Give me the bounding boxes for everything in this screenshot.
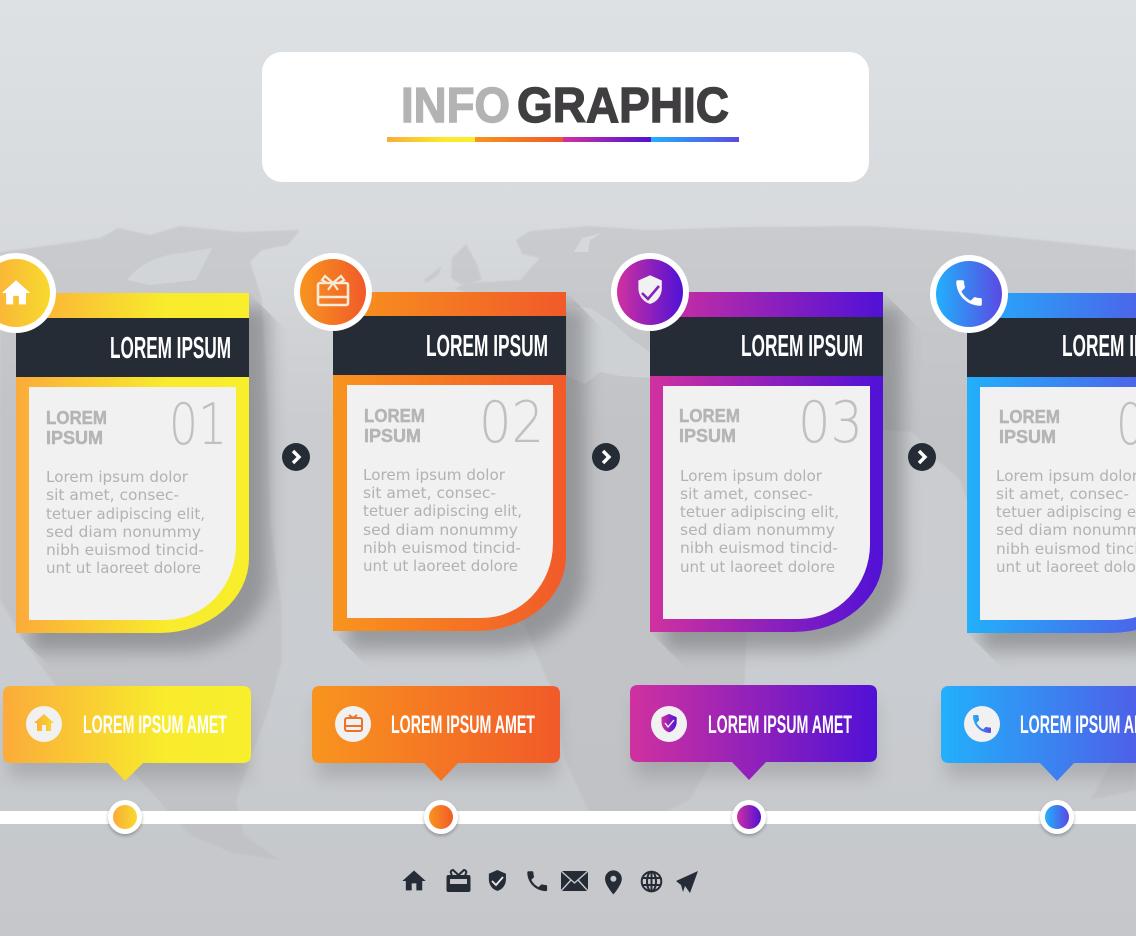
subheading: IPSUM	[679, 425, 736, 446]
icon: location pin	[605, 870, 622, 894]
callout 3	[630, 685, 877, 780]
card heading: LOREM IPSUM	[110, 330, 231, 365]
lighter mediterranean patch	[567, 306, 650, 384]
body text: sit amet, consec-	[680, 485, 813, 503]
icon: shield	[489, 870, 506, 891]
icon: globe	[642, 872, 661, 891]
subheading: IPSUM	[46, 427, 103, 448]
body text: nibh euismod tincid-	[363, 539, 521, 557]
card frame	[16, 293, 249, 633]
title colour bar	[387, 137, 739, 142]
body text: tetuer adipiscing elit,	[46, 505, 205, 523]
icon: gift	[446, 870, 470, 892]
icon: phone	[527, 871, 547, 891]
world map silhouette	[0, 226, 1136, 860]
panel: card 02	[294, 253, 586, 650]
lighter arctic bay in the map	[127, 248, 212, 285]
body text: nibh euismod tincid-	[46, 541, 204, 559]
body text: unt ut laoreet dolore	[363, 557, 518, 575]
dark header band	[967, 318, 1136, 377]
arrow: card 2 to 3	[592, 443, 620, 471]
callout 4	[941, 686, 1136, 781]
number: 01	[169, 392, 227, 458]
title text: GRAPHIC	[517, 79, 729, 133]
card frame	[333, 292, 566, 631]
body text: sit amet, consec-	[996, 485, 1129, 503]
callout 1	[3, 686, 251, 781]
content panel	[663, 386, 870, 619]
subheading: IPSUM	[999, 426, 1056, 447]
panel: card 03	[611, 253, 903, 650]
card heading: LOREM IPSUM	[426, 328, 548, 363]
number: 03	[798, 390, 863, 456]
dark header band	[650, 317, 883, 376]
body text: sit amet, consec-	[363, 484, 496, 502]
card frame	[650, 292, 883, 632]
callout icon: phone	[964, 706, 1000, 742]
title panel	[262, 52, 869, 182]
subheading: IPSUM	[364, 425, 421, 446]
timeline marker 1	[108, 800, 142, 836]
timeline marker 2	[424, 800, 458, 836]
body text: unt ut laoreet dolore	[46, 559, 201, 577]
body text: Lorem ipsum dolor	[996, 467, 1136, 485]
panel: card 04	[930, 255, 1136, 651]
subheading: LOREM	[999, 406, 1060, 427]
body text: sed diam nonummy	[363, 521, 518, 539]
icon: shield badge	[611, 253, 689, 331]
subheading: LOREM	[364, 405, 425, 426]
body text: Lorem ipsum dolor	[680, 467, 823, 485]
body text: sit amet, consec-	[46, 486, 179, 504]
icon: home	[402, 871, 426, 890]
timeline marker 3	[732, 800, 766, 836]
body text: Lorem ipsum dolor	[46, 468, 189, 486]
number: 02	[479, 390, 544, 456]
panel: card 01	[0, 253, 269, 651]
callout icon: shield	[651, 706, 687, 742]
card frame	[967, 293, 1136, 633]
icon: gift badge	[294, 253, 372, 331]
icon: paper plane	[676, 871, 698, 893]
callout text: LOREM IPSUM AMET	[391, 711, 535, 739]
icon: mail	[561, 871, 588, 891]
body text: sed diam nonummy	[680, 521, 835, 539]
arrow: card 1 to 2	[282, 443, 310, 471]
body text: tetuer adipiscing elit,	[680, 503, 839, 521]
timeline line	[0, 811, 1136, 824]
dark header band	[16, 318, 249, 377]
body text: sed diam nonummy	[46, 523, 201, 541]
body text: tetuer adipiscing elit,	[363, 502, 522, 520]
timeline marker 4	[1040, 800, 1074, 836]
content panel	[29, 387, 236, 620]
content panel	[347, 385, 553, 618]
dark header band	[333, 316, 566, 375]
body text: nibh euismod tincid-	[680, 539, 838, 557]
callout icon: gift	[335, 706, 371, 742]
title text: INFO	[401, 79, 510, 133]
icon: phone badge	[930, 255, 1008, 333]
subheading: LOREM	[679, 405, 740, 426]
icon row	[402, 870, 698, 894]
icon: home badge	[0, 253, 56, 333]
callout 2	[312, 686, 560, 781]
subheading: LOREM	[46, 407, 107, 428]
arrow: card 3 to 4	[908, 443, 936, 471]
callout icon: home	[26, 706, 62, 742]
body text: Lorem ipsum dolor	[363, 466, 506, 484]
card heading: LOREM IPSUM	[741, 328, 863, 363]
body text: unt ut laoreet dolore	[680, 558, 835, 576]
content panel	[980, 387, 1136, 620]
lighter baltic inlet	[574, 233, 602, 252]
callout text: LOREM IPSUM AMET	[83, 711, 227, 739]
callout text: LOREM IPSUM AMET	[708, 711, 852, 739]
